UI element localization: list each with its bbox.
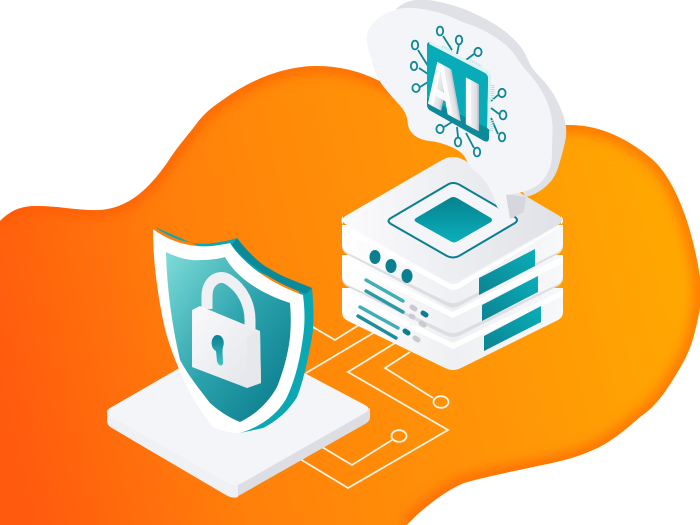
shield bbox=[153, 227, 314, 433]
chip square on server top bbox=[414, 197, 492, 242]
chip pins and circuit nodes bbox=[411, 27, 506, 156]
three round indicators bbox=[370, 250, 412, 283]
keyhole bbox=[212, 335, 224, 365]
ai chip bbox=[411, 27, 506, 156]
padlock shackle bbox=[207, 277, 250, 330]
vent lines and small lights bbox=[358, 280, 426, 340]
ai letters: AI bbox=[435, 47, 491, 153]
ai letters: AI bbox=[433, 46, 489, 152]
padlock bbox=[192, 277, 261, 388]
chip edge hatching bbox=[442, 47, 493, 132]
ai letters: AI bbox=[428, 44, 484, 150]
cloud extrusion bbox=[396, 0, 566, 197]
server stack bbox=[341, 157, 563, 370]
padlock body bbox=[192, 306, 261, 388]
shield teal edge bbox=[155, 227, 314, 433]
chip outline on server top bbox=[388, 183, 517, 258]
shield white frame bbox=[153, 229, 304, 433]
server layer: middle bbox=[342, 255, 563, 337]
chip teal body bbox=[427, 42, 491, 142]
ai letters: AI bbox=[431, 45, 487, 152]
teal status bars bbox=[479, 249, 541, 351]
speech cloud bbox=[367, 0, 566, 219]
circuit lines bbox=[300, 323, 448, 488]
security platform bbox=[107, 338, 370, 498]
server layer: top bbox=[341, 157, 563, 308]
shield teal inner bbox=[166, 252, 291, 422]
cloud face bbox=[367, 8, 553, 219]
cloud tail side bbox=[504, 194, 526, 219]
server layer: bottom bbox=[342, 288, 563, 370]
ai letters: AI bbox=[430, 45, 486, 151]
ai letters: AI bbox=[427, 43, 483, 149]
